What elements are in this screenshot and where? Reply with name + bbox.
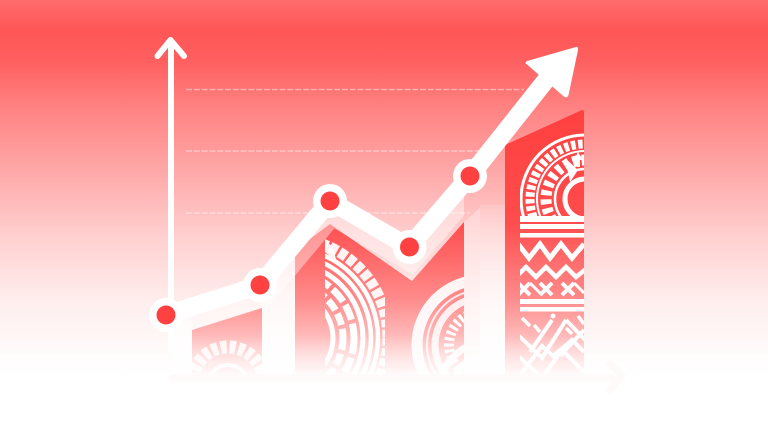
x axis arrow (172, 364, 622, 390)
bar 3 band pattern (520, 224, 584, 372)
bar 2 right pattern (412, 276, 464, 372)
pale columns beside bars (172, 205, 505, 378)
gridlines (186, 90, 524, 213)
data point 2 (243, 268, 277, 302)
arrowhead (526, 47, 578, 97)
bar 2 (295, 208, 480, 371)
data point 5 (453, 159, 487, 193)
bar 1 pattern (192, 340, 262, 372)
line halo (290, 197, 464, 276)
data point 4 (392, 230, 426, 264)
bar 2 side facet (464, 208, 480, 376)
white floor (0, 378, 768, 432)
bar 3 (505, 110, 584, 371)
bar 3 medallion pattern (520, 134, 584, 222)
bottom fade (0, 335, 768, 378)
data point 3 (313, 184, 347, 218)
growth line with arrow (166, 47, 578, 315)
y axis arrow (158, 40, 184, 350)
bar 2 left pattern (325, 239, 385, 372)
data point 1 (149, 298, 183, 332)
bar 1 (192, 308, 262, 371)
